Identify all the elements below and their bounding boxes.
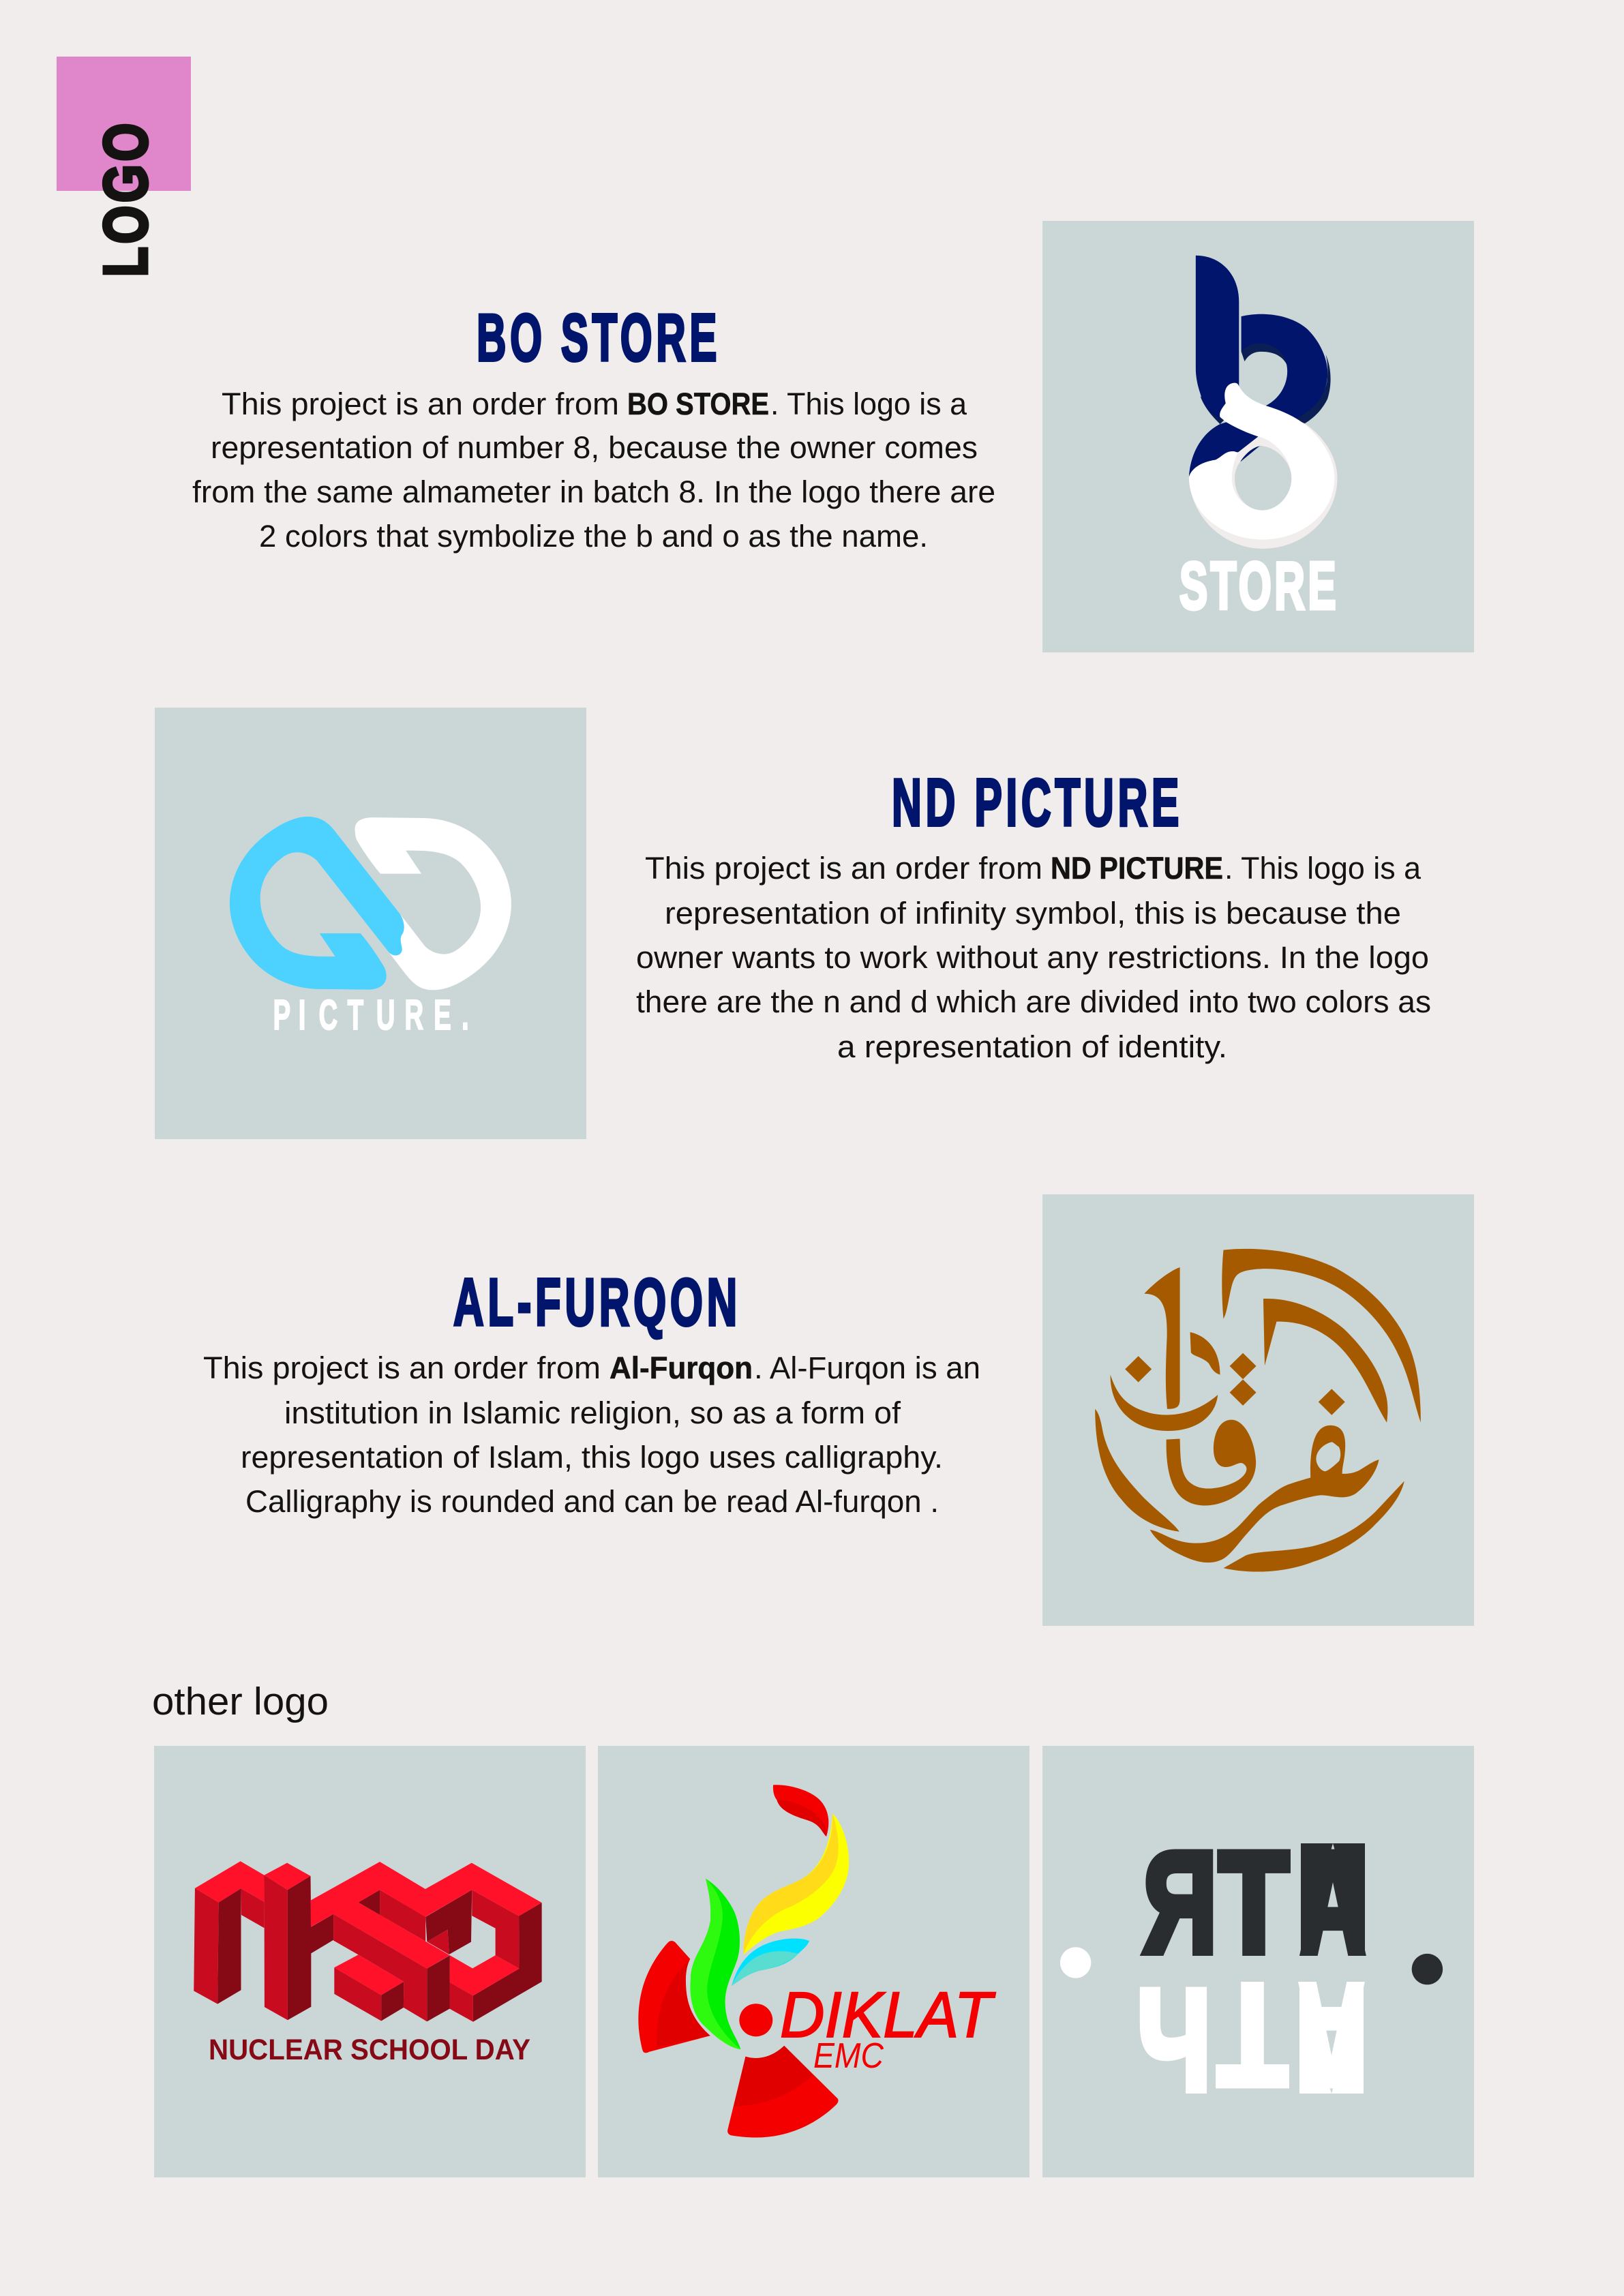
vertical label: LOGO	[92, 120, 160, 277]
description: Calligraphy is rounded and can be read Al-furqon .	[245, 1484, 939, 1519]
wordmark: EMC: EMC	[813, 2036, 884, 2076]
wordmark: PICTURE.	[273, 991, 469, 1038]
icon: b and 8 mark	[1189, 256, 1338, 549]
text block: ND PICTURE	[636, 765, 1431, 1064]
panel: RTA logo	[1042, 1746, 1474, 2177]
description: representation of infinity symbol, this is because the	[665, 896, 1401, 931]
description: there are the n and d which are divided into two colors as	[636, 984, 1431, 1019]
description	[192, 387, 995, 554]
section tag: LOGO	[57, 57, 191, 277]
description: representation of Islam, this logo uses calligraphy.	[241, 1440, 943, 1475]
panel: Diklat EMC logo	[598, 1746, 1029, 2177]
wordmark: DIKLAT: DIKLAT	[780, 1979, 996, 2051]
description: institution in Islamic religion, so as a form of	[284, 1395, 901, 1430]
description: ND PICTURE	[1051, 851, 1223, 886]
description: This project is an order from	[222, 387, 619, 421]
heading: ND PICTURE	[892, 765, 1183, 840]
description: . This logo is a	[770, 387, 967, 421]
heading: AL-FURQON	[453, 1265, 741, 1340]
description: from the same almameter in batch 8. In the logo there are	[192, 474, 995, 509]
description: a representation of identity.	[837, 1029, 1227, 1064]
wordmark: dark letters	[1143, 1822, 1365, 1982]
description: . This logo is a	[1224, 851, 1422, 886]
wordmark: dark letters: Я	[1143, 1822, 1217, 1982]
icon: flame and radiation mark	[638, 1785, 849, 2138]
description	[636, 851, 1431, 1064]
icon: isometric NSD mark	[194, 1861, 542, 2022]
description: This project is an order from	[645, 851, 1042, 886]
wordmark: NUCLEAR SCHOOL DAY	[209, 2034, 530, 2066]
panel: BO STORE logo	[1042, 221, 1474, 652]
icon: dark dot	[1412, 1954, 1443, 1984]
wordmark: dark letters: T	[1219, 1822, 1289, 1982]
description: . Al-Furqon is an	[754, 1350, 980, 1385]
wordmark: dark letters: A	[1301, 1822, 1365, 1982]
text block: BO STORE	[192, 300, 995, 554]
wordmark: STORE	[1179, 548, 1339, 623]
description: BO STORE	[627, 387, 769, 421]
icon: white dot	[1060, 1947, 1091, 1978]
panel: Nuclear School Day logo	[154, 1746, 586, 2177]
wordmark: white reflected letters: A	[1299, 1955, 1364, 2115]
description: This project is an order from	[203, 1350, 601, 1385]
icon: calligraphy mark	[1095, 1249, 1421, 1572]
text block: AL-FURQON	[203, 1265, 980, 1519]
heading: BO STORE	[477, 300, 721, 375]
description: Al-Furqon	[610, 1350, 753, 1385]
description	[203, 1350, 980, 1519]
panel: AL-FURQON logo	[1042, 1194, 1474, 1626]
description: representation of number 8, because the owner comes	[211, 430, 978, 465]
description: owner wants to work without any restrictions. In the logo	[636, 940, 1429, 975]
wordmark: white reflected letters	[1137, 1955, 1364, 2120]
wordmark: white reflected letters: T	[1218, 1955, 1287, 2115]
panel: ND PICTURE logo	[155, 708, 586, 1139]
icon: infinity n and d mark	[230, 817, 511, 990]
pink square	[57, 57, 191, 191]
description: 2 colors that symbolize the b and o as the name.	[259, 519, 928, 554]
wordmark: white reflected letters: Ч	[1137, 1960, 1211, 2120]
label: other logo: other logo	[152, 1680, 329, 1723]
